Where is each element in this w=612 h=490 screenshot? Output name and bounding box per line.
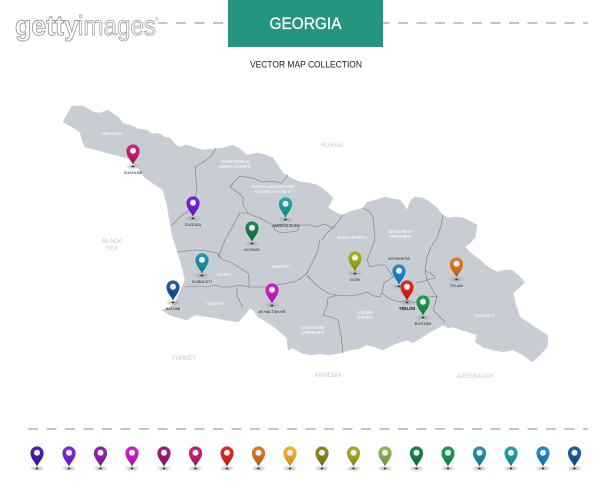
pin: Zugdidi: ZUGDIDI bbox=[185, 222, 201, 227]
pin: Tbilisi bbox=[399, 280, 416, 312]
pin: Rustavi: RUSTAVI bbox=[415, 321, 431, 326]
region labels: MTIANETI bbox=[391, 234, 411, 239]
title banner bbox=[228, 0, 383, 47]
region labels: SAMEGRELO bbox=[221, 159, 249, 164]
pin: Mtskheta bbox=[388, 256, 410, 290]
pin: Kutaisi bbox=[244, 221, 260, 252]
neighbouring country and sea labels: RUSSIA bbox=[321, 143, 343, 149]
pin: Sukhumi bbox=[124, 144, 142, 175]
neighbouring country and sea labels: BLACK bbox=[102, 239, 122, 245]
region labels: RACHA-LECHKHUMI bbox=[252, 184, 294, 189]
region labels: MTSKHETA- bbox=[388, 229, 414, 234]
pin: Kutaisi: KUTAISI bbox=[244, 247, 260, 252]
region labels: ZEMO SVANETI bbox=[219, 164, 251, 169]
watermark logo: getty bbox=[15, 10, 79, 41]
pin: Kobuleti: KOBULETI bbox=[192, 279, 212, 284]
region labels: KVEMO SVANETI bbox=[255, 189, 291, 194]
region labels bbox=[101, 131, 494, 335]
region labels: SAMTSKHE- bbox=[300, 325, 326, 330]
subtitle: VECTOR MAP COLLECTION bbox=[250, 60, 362, 70]
pin colour legend bbox=[29, 446, 582, 472]
pin: Rustavi bbox=[415, 295, 431, 326]
pin: Akhaltsikhe bbox=[258, 283, 286, 314]
country silhouette bbox=[63, 106, 548, 362]
neighbouring country and sea labels: ARMENIA bbox=[314, 373, 342, 379]
pin: Ambrolauri: AMBROLAURI bbox=[272, 223, 299, 228]
region labels: KAKHETI bbox=[476, 313, 494, 318]
pin: Zugdidi bbox=[185, 196, 201, 227]
region labels: KVEMO bbox=[357, 310, 374, 315]
neighbouring country and sea labels bbox=[102, 143, 494, 380]
pin: Batumi: BATUMI bbox=[166, 306, 180, 311]
pin: Mtskheta: MTSKHETA bbox=[388, 256, 410, 261]
region labels: SHIDA KARTLI bbox=[337, 235, 367, 240]
watermark logo bbox=[15, 10, 159, 42]
title banner: GEORGIA bbox=[270, 15, 342, 33]
pin: Akhaltsikhe: AKHALTSIKHE bbox=[258, 309, 286, 314]
pin: Tbilisi: TBILISI bbox=[399, 306, 416, 312]
map of Georgia bbox=[63, 106, 548, 362]
neighbouring country and sea labels: SEA bbox=[106, 246, 118, 252]
pin: Sukhumi: SUKHUMI bbox=[124, 170, 142, 175]
region labels: GURIA bbox=[217, 272, 231, 277]
region labels: ABKHAZIA bbox=[101, 131, 123, 136]
bottom dashed line bbox=[28, 428, 588, 430]
region labels: JAVAKHETI bbox=[301, 330, 325, 335]
watermark logo: ® bbox=[155, 16, 159, 23]
region labels: IMERETI bbox=[272, 264, 290, 269]
pin: Telavi: TELAVI bbox=[450, 283, 463, 288]
neighbouring country and sea labels: AZERBAIJAN bbox=[456, 374, 494, 380]
neighbouring country and sea labels: TURKEY bbox=[172, 356, 196, 362]
region labels: KARTLI bbox=[357, 315, 373, 320]
pin: Batumi bbox=[165, 280, 181, 311]
pin: Kobuleti bbox=[192, 253, 212, 284]
region labels: ADJARA bbox=[206, 301, 224, 306]
pin: Gori: GORI bbox=[350, 277, 360, 282]
top dashed line bbox=[28, 22, 588, 24]
pin: Ambrolauri bbox=[272, 197, 299, 228]
watermark logo: images bbox=[78, 10, 156, 41]
pin: Telavi bbox=[448, 257, 464, 288]
region borders bbox=[172, 148, 445, 353]
map pins with city labels bbox=[124, 144, 464, 326]
pin: Gori bbox=[347, 251, 363, 282]
